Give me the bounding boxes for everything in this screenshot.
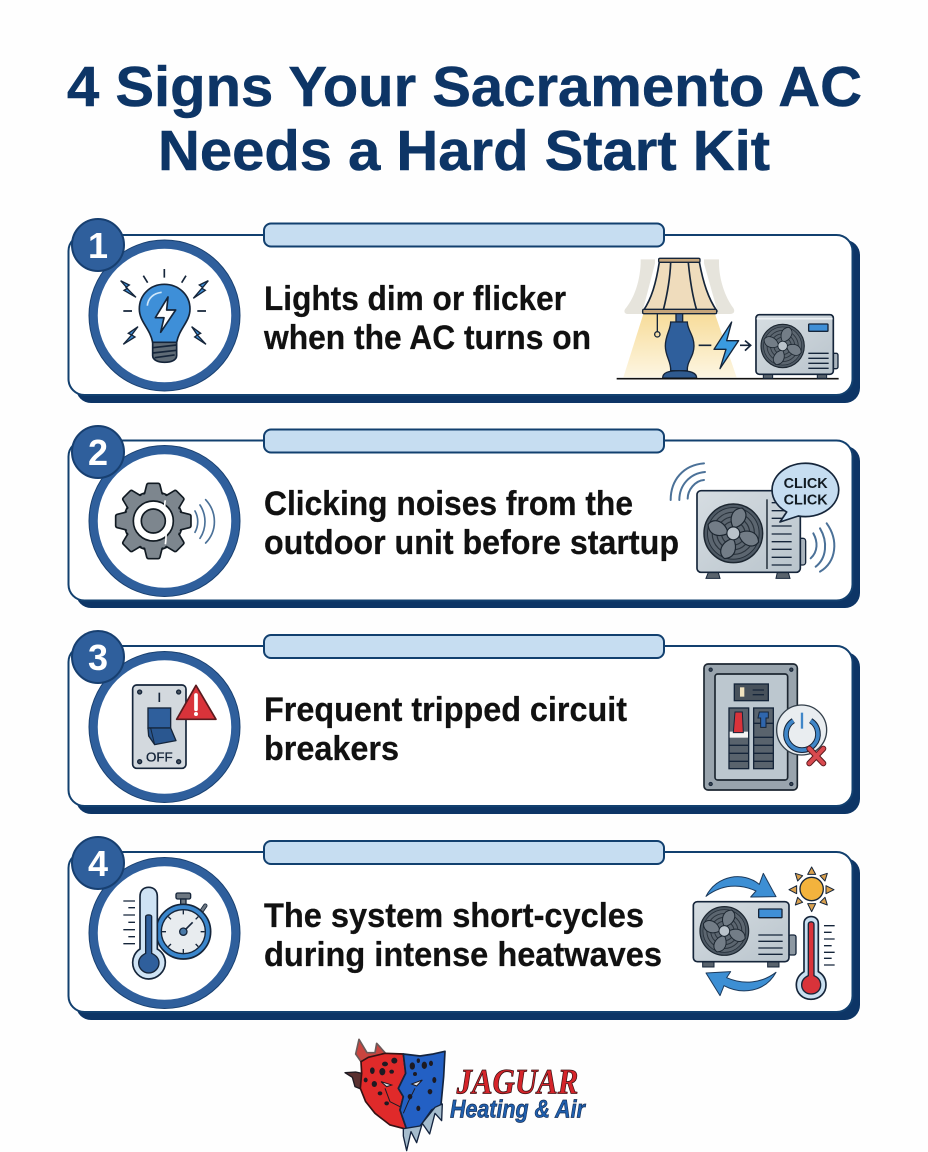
icon: thermometer and stopwatch in ring [89,858,240,1008]
badge: number 2 [72,426,124,478]
title: 4 Signs Your Sacramento AC [67,55,862,119]
icon: off switch with warning in ring: OFF [146,749,173,764]
icon: cracked gear in ring [89,446,240,596]
text: sign 3 [264,691,627,768]
title: Needs a Hard Start Kit [158,119,770,183]
icon: breaker panel with power off [704,664,827,790]
text: company name [450,1061,586,1123]
title [67,55,862,183]
panel: sign 3 tripped breakers [68,631,860,814]
icon: outdoor unit clicking: CLICK [784,476,828,492]
panel: sign 1 lights dim [68,219,860,403]
icon: AC short cycle with sun and thermometer [693,867,835,999]
text: sign 1: when the AC turns on [263,319,591,357]
text: sign 2 [264,485,679,562]
badge: number 2: 2 [88,432,108,473]
icon: light bulb in ring [89,240,240,391]
panel: sign 2 clicking noises [68,426,860,608]
icon: red and blue jaguar head [345,1039,445,1151]
text: sign 1 [263,280,591,357]
icon: outdoor unit clicking: CLICK [784,492,828,508]
text: company name: JAGUAR [456,1061,578,1101]
text: sign 3: Frequent tripped circuit [264,691,627,729]
badge: number 4 [72,837,124,889]
text: sign 4 [264,897,662,974]
icon: outdoor unit clicking [671,463,839,578]
badge: number 3: 3 [88,637,108,678]
text: sign 3: breakers [264,730,399,768]
badge: number 1 [72,219,124,271]
text: sign 2: outdoor unit before startup [264,524,679,562]
icon: off switch with warning in ring [89,652,240,802]
badge: number 4: 4 [88,843,108,884]
text: sign 1: Lights dim or flicker [264,280,566,318]
logo: Jaguar Heating & Air [345,1039,586,1151]
text: company name: Heating & Air [450,1096,586,1123]
panel: sign 4 short cycling [68,837,860,1020]
text: sign 4: during intense heatwaves [264,936,662,974]
icon: flickering lamp and AC unit [617,258,839,379]
text: sign 4: The system short-cycles [264,897,644,935]
text: sign 2: Clicking noises from the [264,485,633,523]
badge: number 3 [72,631,124,683]
badge: number 1: 1 [88,225,108,266]
